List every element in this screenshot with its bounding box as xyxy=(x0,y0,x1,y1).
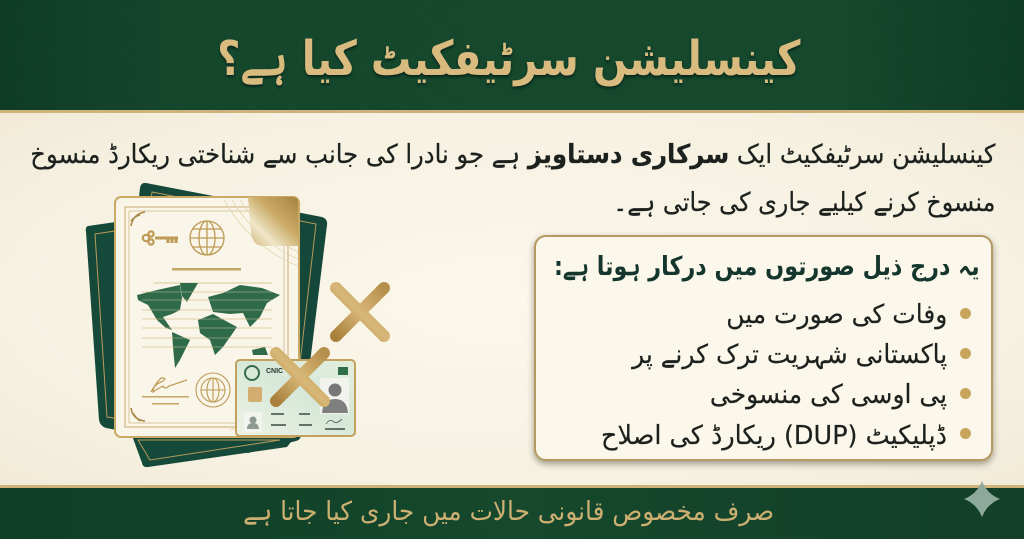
page background xyxy=(0,112,1024,487)
intro paragraph xyxy=(30,140,996,218)
icon: seal globe xyxy=(196,373,230,407)
header band xyxy=(0,0,1024,113)
page curl xyxy=(248,197,298,246)
intro line 1: کینسلیشن سرٹیفکیٹ ایک سرکاری دستاویز ہے جو نادرا کی جانب سے شناختی ریکارڈ منسوخ xyxy=(30,140,995,170)
bullet 1 dot xyxy=(960,308,971,319)
gold cross icon on card xyxy=(276,353,324,401)
passport back left xyxy=(86,220,150,436)
bullet 1: وفات کی صورت میں xyxy=(726,300,947,330)
footer text: صرف مخصوص قانونی حالات میں جاری کیا جاتا ہے xyxy=(243,497,774,527)
icon: globe top xyxy=(190,221,224,255)
bullet 2: پاکستانی شہریت ترک کرنے پر xyxy=(632,340,947,370)
passport back right xyxy=(113,183,327,453)
title: کینسلیشن سرٹیفکیٹ کیا ہے؟ xyxy=(217,31,800,87)
signature xyxy=(151,378,187,392)
footer band xyxy=(0,485,1024,539)
bullet 3 dot xyxy=(960,388,971,399)
icon: sparkle xyxy=(964,481,1000,517)
passport back bottom xyxy=(130,430,300,467)
faint map lines xyxy=(142,292,272,347)
certificate xyxy=(115,197,299,437)
guilloche lines xyxy=(224,200,298,430)
bullet 4 dot xyxy=(960,428,971,439)
CNIC card: CNIC xyxy=(266,368,283,375)
box heading: یہ درج ذیل صورتوں میں درکار ہوتا ہے: xyxy=(554,252,980,282)
text lines behind map xyxy=(142,283,272,347)
world map xyxy=(137,283,280,368)
CNIC card xyxy=(236,360,355,436)
bullet 2 dot xyxy=(960,348,971,359)
bullet 4: ڈپلیکیٹ (DUP) ریکارڈ کی اصلاح xyxy=(601,421,947,451)
icon: key xyxy=(143,231,178,245)
requirements box xyxy=(534,235,993,461)
bullet list xyxy=(601,300,971,451)
intro line 2: منسوخ کرنے کیلیے جاری کی جاتی ہے۔ xyxy=(613,188,995,218)
bullet 3: پی اوسی کی منسوخی xyxy=(710,380,947,410)
gold cross icon right xyxy=(336,288,384,336)
